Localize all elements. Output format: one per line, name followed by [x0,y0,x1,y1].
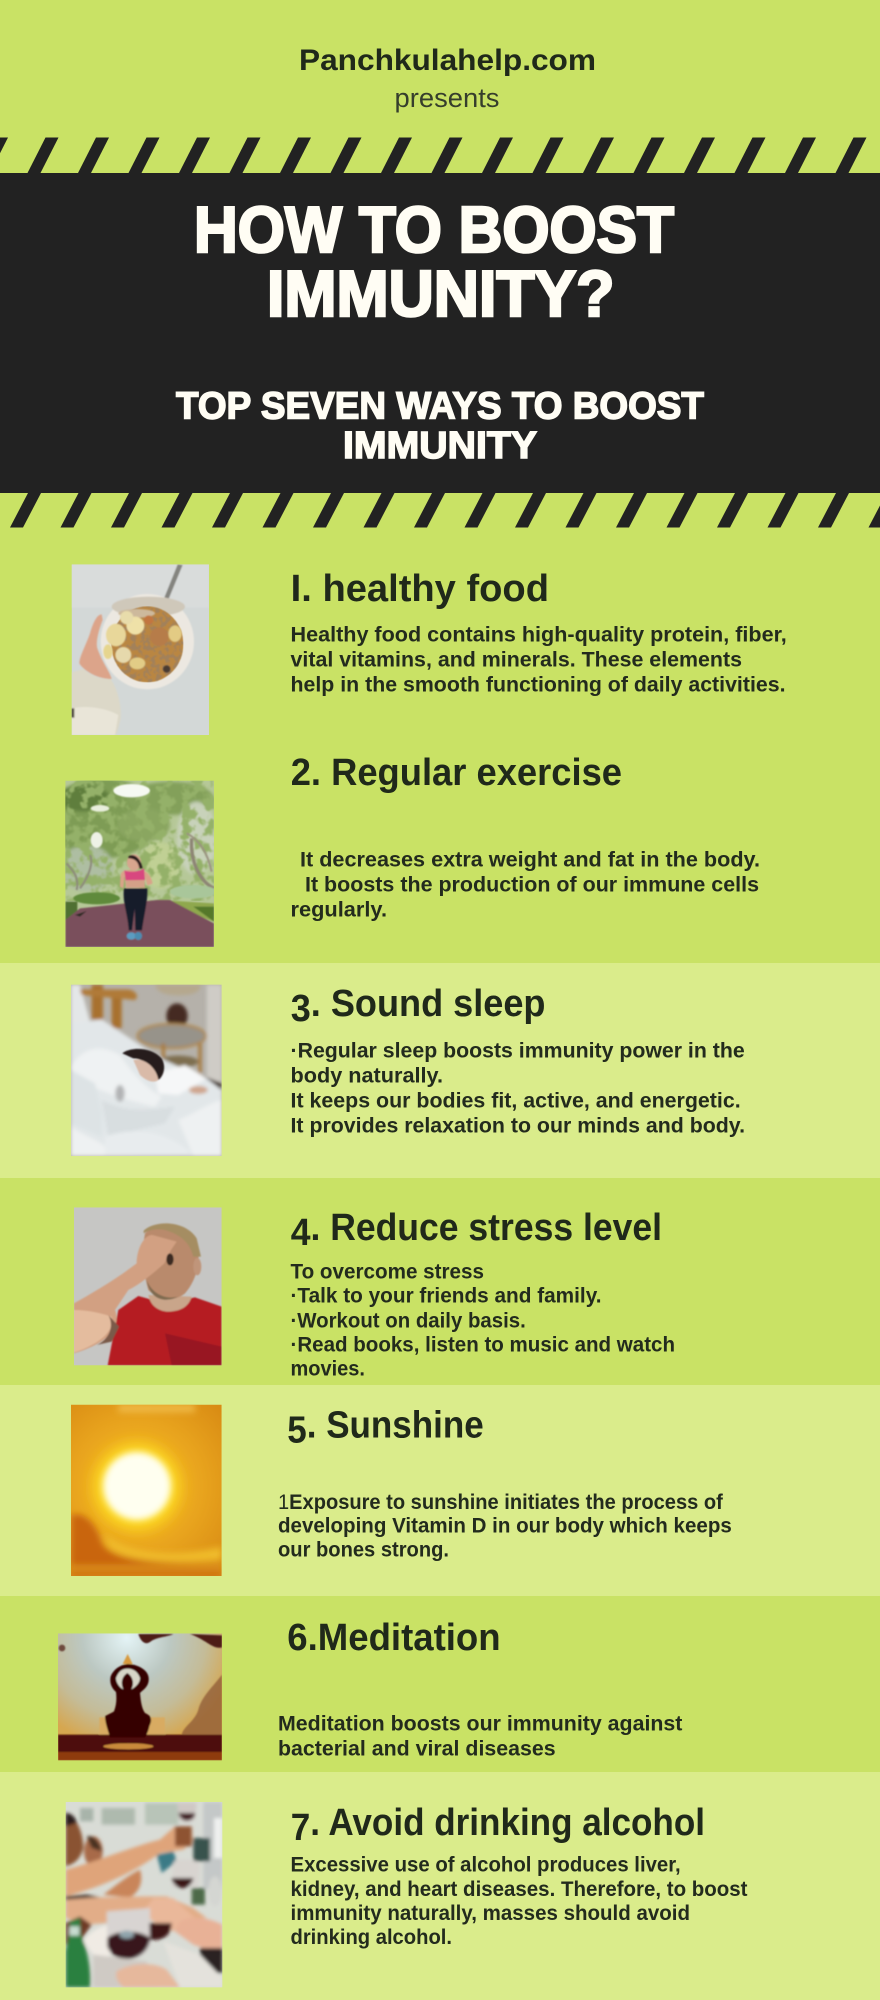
description: body naturally. [290,1063,443,1087]
main title: HOW TO BOOST [194,193,674,266]
photo: stressed man holding head [74,1207,222,1365]
header: site name and presents: Panchkulahelp.com [299,44,596,77]
photo: bowl of granola [71,564,209,735]
description: help in the smooth functioning of daily activities. [290,673,786,697]
description: movies. [290,1357,365,1381]
description: ·Read books, listen to music and watch [290,1333,675,1357]
description: It decreases extra weight and fat in the body. [300,848,760,872]
description: To overcome stress [290,1259,484,1283]
heading: 2. Regular exercise [291,752,622,794]
description [278,1490,732,1562]
description [278,1712,682,1761]
description: ·Workout on daily basis. [290,1308,526,1332]
heading: 3 [291,988,311,1030]
bottom hazard stripes [10,493,880,528]
section 5: sunshine [71,1405,732,1576]
photo: people toasting with wine [66,1802,222,1987]
description: regularly. [290,898,387,922]
description: 1Exposure to sunshine initiates the process of [278,1490,724,1514]
description [290,1259,675,1381]
description: ·Regular sleep boosts immunity power in the [290,1038,745,1062]
subtitle: IMMUNITY [343,425,537,467]
description: drinking alcohol. [290,1925,452,1949]
description: vital vitamins, and minerals. These elements [290,648,742,672]
heading: 6.Meditation [287,1617,501,1659]
header: site name and presents [299,44,596,113]
photo: woman jogging in park [65,780,214,947]
heading: . Avoid drinking alcohol [310,1802,705,1844]
description: It keeps our bodies fit, active, and energetic. [290,1089,741,1113]
description [290,1853,748,1949]
heading: . Reduce stress level [310,1207,662,1249]
section 3: sound sleep [71,983,745,1156]
heading: 7 [291,1807,310,1849]
subtitle [176,386,704,467]
description: ·Talk to your friends and family. [290,1284,602,1308]
section 7: avoid drinking alcohol [66,1802,747,1987]
section 6: meditation [58,1617,682,1761]
main title [194,193,674,330]
heading: 5 [287,1410,307,1452]
description: Healthy food contains high-quality protein, fiber, [290,623,787,647]
main title: IMMUNITY? [267,257,614,330]
description: bacterial and viral diseases [278,1737,556,1761]
heading: . Sunshine [307,1405,484,1447]
top hazard stripes [0,138,866,173]
section 1: healthy food [71,564,787,735]
header: site name and presents: presents [394,83,500,113]
description: kidney, and heart diseases. Therefore, to boost [290,1877,748,1901]
description: It boosts the production of our immune cells [305,873,759,897]
description: our bones strong. [278,1538,449,1562]
heading: 4 [291,1212,310,1254]
section 4: reduce stress level [74,1207,675,1381]
description [290,1038,745,1138]
description [290,623,787,697]
photo: woman sleeping in bed [71,985,222,1156]
description: Excessive use of alcohol produces liver, [290,1853,681,1877]
section 2: regular exercise [47,752,760,947]
description: immunity naturally, masses should avoid [290,1901,690,1925]
title banner [0,173,880,493]
description: Meditation boosts our immunity against [278,1712,682,1736]
description [290,848,760,922]
description: It provides relaxation to our minds and body. [290,1114,745,1138]
photo: bright sun in orange sky [71,1405,222,1576]
subtitle: TOP SEVEN WAYS TO BOOST [176,386,704,428]
heading: I. healthy food [291,568,549,610]
description: developing Vitamin D in our body which keeps [278,1514,732,1538]
photo: meditating silhouette at sunset [58,1633,222,1760]
heading: . Sound sleep [311,983,546,1025]
